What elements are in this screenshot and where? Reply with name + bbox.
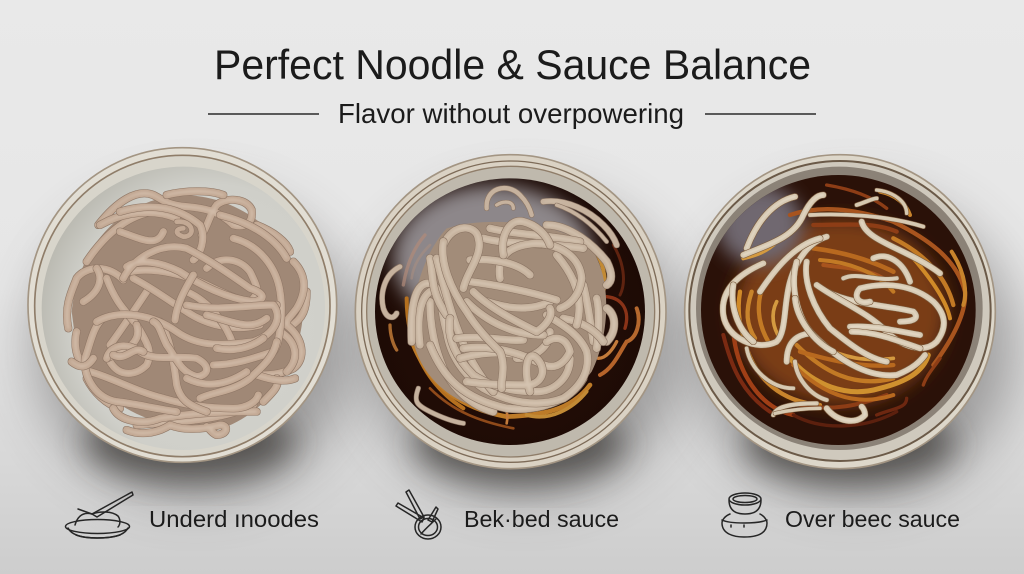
- noodles: [67, 191, 307, 435]
- bowl shadows: [35, 195, 1015, 495]
- noodles: [723, 190, 944, 421]
- noodle mass base: [72, 195, 303, 430]
- bowl 1: plain noodles: [28, 148, 337, 462]
- label: over-sauced: Over beec sauce: [785, 506, 960, 532]
- noodles: [382, 188, 617, 423]
- label: balanced sauce: Bek·bed sauce: [464, 506, 619, 532]
- icon: stacked sauce bowls: [722, 493, 767, 537]
- sauce reflection: [393, 185, 593, 332]
- sauce colour and reflection: [717, 185, 947, 405]
- subtitle with rules: Flavor without overpowering: [338, 98, 684, 129]
- bowl 2: balanced sauce: [355, 155, 666, 469]
- noodle mass base: [412, 222, 606, 411]
- title: Perfect Noodle & Sauce Balance: [214, 41, 811, 88]
- label: undercooked noodles: Underd ınoodes: [149, 506, 319, 532]
- icon: whisk and sticks: [396, 490, 441, 539]
- bowl 3: over-sauced: [685, 155, 995, 469]
- icon: plate with chopsticks: [66, 492, 133, 538]
- submerged strands: [723, 185, 965, 426]
- submerged strands: [390, 235, 639, 428]
